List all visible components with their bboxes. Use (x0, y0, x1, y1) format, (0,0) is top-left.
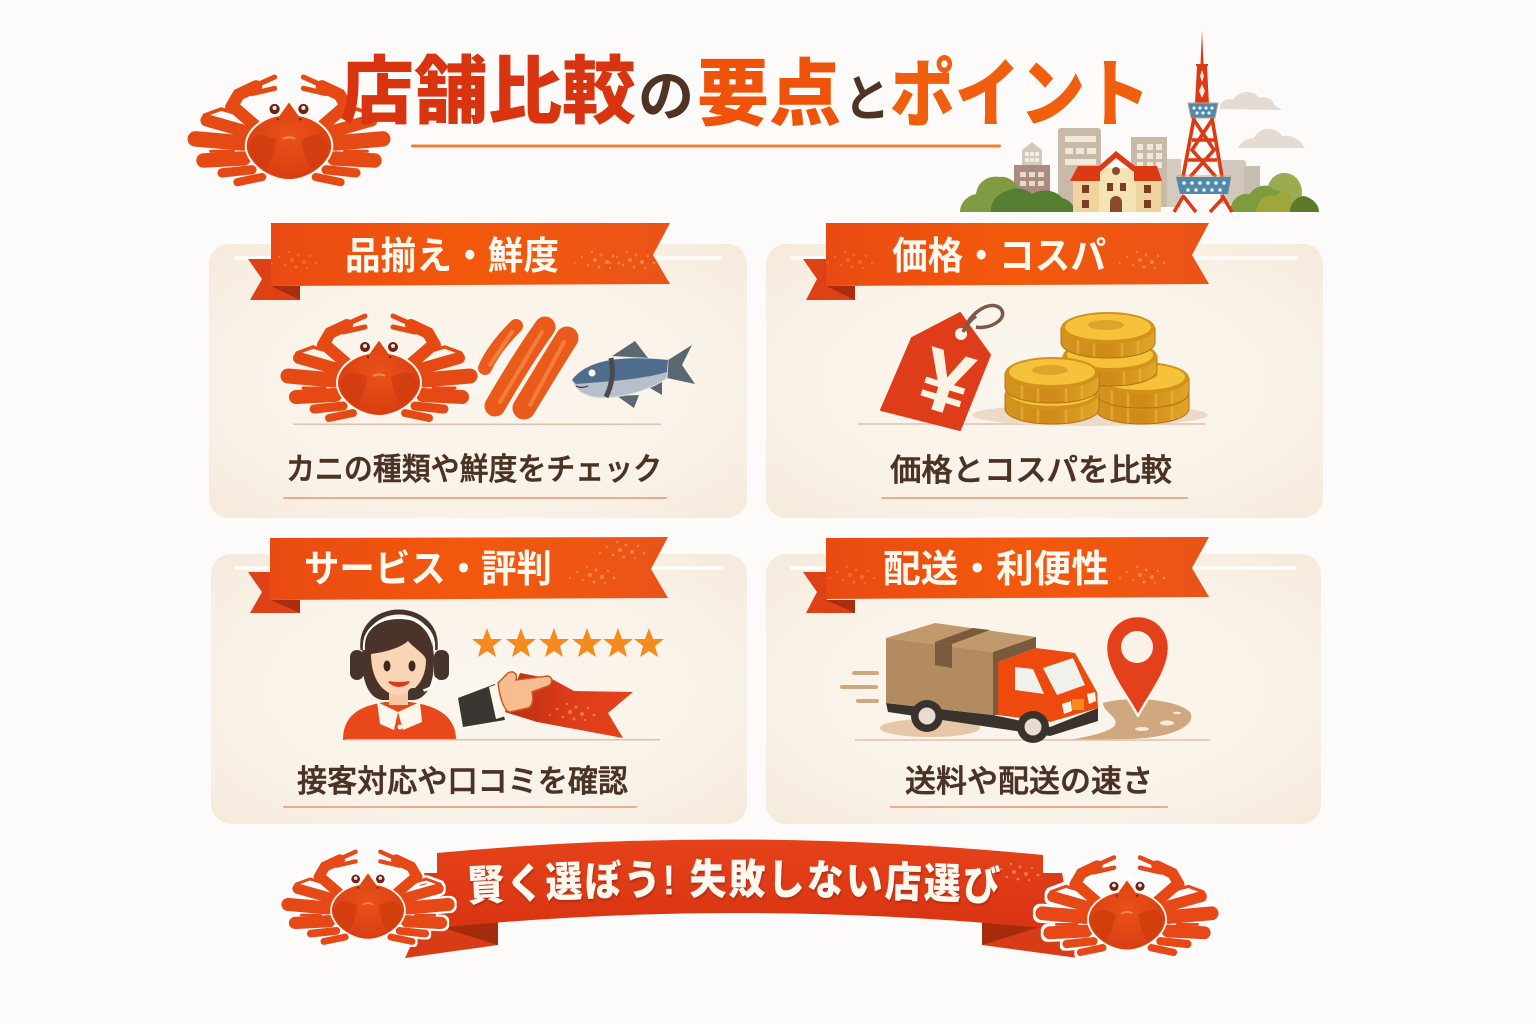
icon: pointing hand over flag (458, 672, 633, 738)
icon: snow crab (288, 316, 470, 418)
banner slogan: 賢く選ぼう! 失敗しない店選び (469, 858, 1001, 908)
icon: support agent with headset (343, 612, 456, 740)
underline (890, 806, 1168, 808)
underline (881, 497, 1188, 499)
icon: location pin (1106, 616, 1169, 716)
city buildings (1014, 128, 1260, 208)
ribbon heading (803, 537, 1209, 613)
clouds (1220, 92, 1305, 148)
title (340, 50, 1150, 136)
speed lines (842, 673, 877, 701)
title crab icon (195, 77, 383, 182)
icon: price tag: ¥ (908, 327, 984, 436)
banner body (437, 839, 1043, 928)
icon: fish (572, 341, 695, 408)
card background (766, 244, 1323, 518)
skyline with tower (960, 30, 1319, 212)
title: 要点 (697, 54, 841, 135)
title: の (638, 65, 694, 128)
ground shadow (858, 423, 1205, 425)
icon: delivery truck (886, 623, 1098, 743)
ribbon heading: 配送・利便性 (883, 549, 1109, 591)
bottom right crab (1042, 857, 1212, 952)
ribbon heading (248, 223, 670, 300)
icon: crab leg meat (485, 326, 567, 408)
western style house (1070, 151, 1162, 212)
panel: assortment and freshness (209, 223, 747, 518)
icon: stacked coins (1005, 312, 1189, 424)
ribbon heading (803, 223, 1209, 300)
underline (283, 497, 667, 499)
underline (283, 806, 637, 808)
icon: six rating stars (472, 628, 664, 657)
card background (211, 554, 747, 824)
ribbon heading: 品揃え・鮮度 (345, 236, 559, 278)
ground line (293, 424, 661, 425)
ground line (345, 739, 660, 740)
panel: price and value (766, 223, 1323, 518)
sapporo tv tower (1174, 30, 1232, 212)
panel: delivery and convenience (766, 537, 1321, 824)
title: ポイント (890, 53, 1150, 136)
card background (209, 244, 747, 518)
description: 価格とコスパを比較 (890, 453, 1172, 488)
bottom left crab (288, 852, 448, 941)
ribbon heading: サービス・評判 (304, 549, 552, 591)
banner tails (405, 873, 1078, 958)
ground shadow and map patch (855, 699, 1210, 740)
ribbon heading: 価格・コスパ (892, 236, 1106, 278)
icon: price tag (881, 305, 1003, 436)
description: 送料や配送の速さ (905, 764, 1153, 799)
bushes (960, 173, 1319, 212)
bottom banner (405, 840, 1076, 958)
title: 店舗比較 (340, 50, 636, 133)
ribbon heading (248, 537, 668, 613)
title: と (844, 71, 890, 127)
panel: service and reviews (211, 537, 747, 824)
title underline (411, 144, 1001, 148)
card background (766, 554, 1321, 824)
description: 接客対応や口コミを確認 (297, 764, 628, 799)
description: カニの種類や鮮度をチェック (286, 452, 662, 487)
